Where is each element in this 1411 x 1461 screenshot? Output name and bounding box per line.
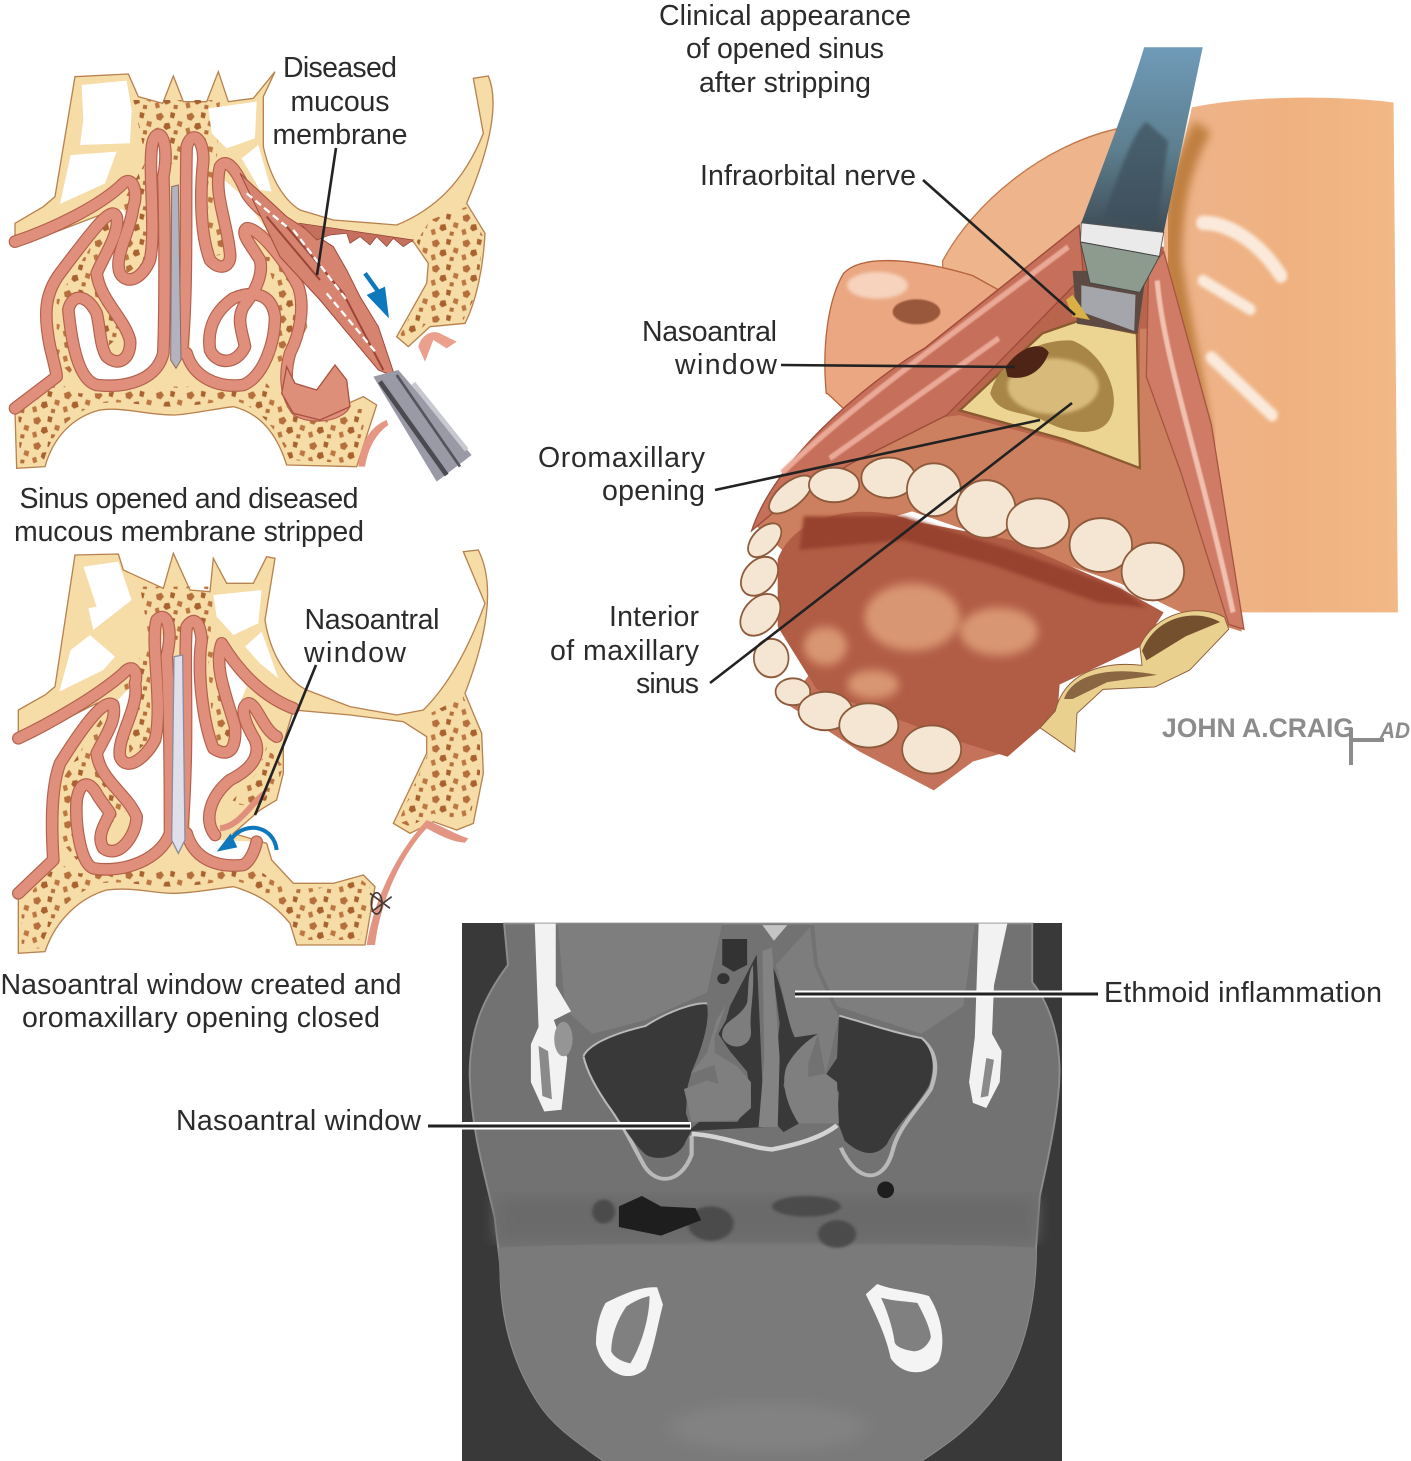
chin light — [669, 1403, 868, 1451]
label: diseased mucous membrane: mucous — [290, 86, 390, 118]
lower tissue — [498, 1243, 1036, 1461]
nose highlight — [847, 272, 908, 299]
head tissue — [470, 923, 1060, 1461]
orbital air cells — [59, 562, 278, 692]
label: nasoantral window CT: Nasoantral window — [176, 1105, 421, 1137]
label: diseased mucous membrane — [272, 52, 408, 151]
right maxillary sinus — [826, 1017, 933, 1153]
mandible right — [866, 1284, 942, 1372]
scissors suture — [370, 893, 392, 914]
diseased mucous membrane strip — [240, 173, 395, 377]
left inferior turbinate — [684, 1005, 751, 1122]
orbital air cells — [60, 81, 272, 204]
mucosa ribbons outline — [15, 135, 343, 415]
septum — [759, 948, 780, 1127]
closed flap — [367, 820, 468, 945]
retractor metal band — [1080, 223, 1164, 256]
nose — [825, 261, 999, 420]
forceps — [373, 370, 472, 482]
nostril — [893, 299, 940, 324]
nasal airway left — [688, 954, 764, 1131]
label: clinical appearance — [659, 0, 911, 99]
infraorbital nerve — [1066, 295, 1090, 320]
label: interior of maxillary sinus: sinus — [636, 668, 699, 700]
strip highlights — [247, 193, 377, 353]
marrow speckles — [22, 587, 480, 948]
retractor shank backing — [1073, 271, 1146, 333]
zygomatic right marrow — [981, 1058, 994, 1098]
caption: window created — [0, 969, 402, 1034]
marrow speckles — [18, 100, 483, 463]
label: interior of maxillary sinus — [550, 601, 700, 700]
label: oromaxillary opening — [538, 442, 706, 507]
mandible left — [596, 1287, 663, 1376]
leader lines — [255, 148, 1075, 815]
panel: window created and opening closed — [18, 550, 488, 953]
lower teeth — [733, 517, 961, 774]
buccal mucosa fragment — [358, 420, 388, 467]
sinus light wall — [1008, 358, 1099, 414]
sinus wall mucosa flap — [418, 332, 457, 362]
panel: clinical appearance illustration — [733, 47, 1398, 790]
signature: AD — [1379, 718, 1410, 743]
mucosa ribbons — [15, 135, 343, 415]
retractor blade — [1081, 47, 1203, 232]
tissue under flaps — [912, 232, 1168, 473]
label: nasoantral window right: window — [674, 349, 777, 381]
sinus window bone rim — [960, 321, 1140, 468]
right inferior turbinate — [784, 1034, 839, 1124]
gingival mucosa — [756, 329, 1242, 632]
label: nasoantral window right: Nasoantral — [642, 316, 777, 348]
panel: coronal CT scan — [462, 923, 1062, 1461]
caption: window created: oromaxillary opening closed — [22, 1002, 380, 1034]
strip dark lines — [267, 217, 383, 370]
scan background — [462, 923, 1062, 1461]
nasal airways — [79, 630, 257, 865]
label: diseased mucous membrane: membrane — [272, 119, 408, 151]
label: clinical appearance: of opened sinus — [686, 33, 884, 65]
retractor shank — [1081, 285, 1136, 331]
CT leader: ethmoid inflammation — [795, 990, 1098, 998]
bone section — [18, 550, 488, 953]
label: interior of maxillary sinus: Interior — [609, 601, 700, 633]
label: infraorbital nerve: Infraorbital nerve — [700, 160, 916, 192]
ethmoid inflammation — [776, 927, 839, 1075]
signature: JOHN A.CRAIG — [1162, 713, 1354, 743]
nasal airways — [68, 140, 275, 385]
arrow: blue downward — [365, 273, 389, 318]
arrowhead — [217, 833, 237, 852]
caption: sinus opened: mucous membrane stripped — [14, 516, 364, 548]
dark joint space lower — [1064, 671, 1157, 699]
tooth air — [877, 1182, 894, 1198]
arrow: blue curved — [232, 828, 277, 850]
marrow right — [881, 1298, 931, 1351]
label: nasoantral window left: window — [303, 637, 406, 669]
forehead skin — [943, 129, 1164, 348]
label: ethmoid inflammation: Ethmoid inflammation — [1104, 977, 1382, 1009]
signature — [1162, 713, 1410, 765]
caption: sinus opened — [14, 483, 364, 548]
sinus interior — [990, 340, 1114, 432]
skin highlights — [1203, 223, 1281, 415]
nasal floor bone — [692, 1125, 837, 1149]
bone section — [15, 72, 493, 468]
sinus bone walls — [584, 1004, 935, 1179]
label: nasoantral window right — [642, 316, 777, 381]
left maxillary sinus — [584, 1004, 708, 1158]
caption: sinus opened: Sinus opened and diseased — [20, 483, 358, 515]
orbit right — [814, 923, 975, 1034]
CT leader: nasoantral window — [428, 1122, 691, 1130]
panel: sinus opened and membrane stripped — [15, 72, 493, 482]
septum core — [171, 185, 181, 368]
blade shadow — [1103, 122, 1168, 228]
right flap highlight — [1157, 280, 1233, 612]
hairline shadow — [1172, 127, 1211, 521]
dark palate band — [799, 516, 1146, 608]
face skin — [1164, 98, 1398, 612]
label: nasoantral window left: Nasoantral — [304, 604, 440, 636]
flap highlights — [782, 247, 1068, 473]
turbinate inner lining — [220, 793, 265, 828]
zygomatic left marrow — [539, 1046, 552, 1099]
palate — [778, 512, 1164, 757]
upper teeth — [764, 458, 1184, 600]
nasal airway right — [772, 965, 818, 1132]
palate highlights — [804, 584, 1038, 699]
dental dark patches — [592, 1196, 856, 1248]
orbit left — [558, 923, 722, 1034]
label: nasoantral window left — [303, 604, 440, 669]
mandibular bone — [1040, 611, 1229, 752]
zygomatic left — [531, 923, 571, 1111]
right retracted flap — [1146, 252, 1244, 629]
label: oromaxillary opening: Oromaxillary — [538, 442, 706, 474]
ethmoid bone fleck — [762, 925, 787, 941]
left retracted flap — [752, 225, 1083, 531]
lower gum — [786, 665, 1008, 790]
mucosa ribbons — [18, 617, 293, 893]
label: diseased mucous membrane: Diseased — [283, 52, 397, 84]
caption: window created: Nasoantral window created and — [0, 969, 402, 1001]
label: clinical appearance: Clinical appearance — [659, 0, 911, 32]
polyp mass — [282, 365, 350, 420]
label: clinical appearance: after stripping — [699, 67, 871, 99]
retractor lower bevel — [1080, 242, 1159, 293]
mucosa ribbons outline — [18, 617, 293, 893]
marrow left — [611, 1296, 650, 1363]
septum core — [172, 655, 185, 853]
zygomatic right — [969, 923, 1007, 1108]
dental haze — [496, 1196, 1036, 1241]
ethmoid cells — [717, 939, 747, 984]
dental air space — [619, 1196, 701, 1236]
label: oromaxillary opening: opening — [602, 475, 705, 507]
label: interior of maxillary sinus: of maxillary — [550, 635, 700, 667]
nasoantral opening — [1005, 346, 1049, 378]
zygomatic left grey — [554, 1022, 573, 1056]
left middle turbinate — [722, 965, 753, 1047]
dark joint space upper — [1142, 616, 1220, 660]
sinus roof membrane — [300, 223, 413, 247]
